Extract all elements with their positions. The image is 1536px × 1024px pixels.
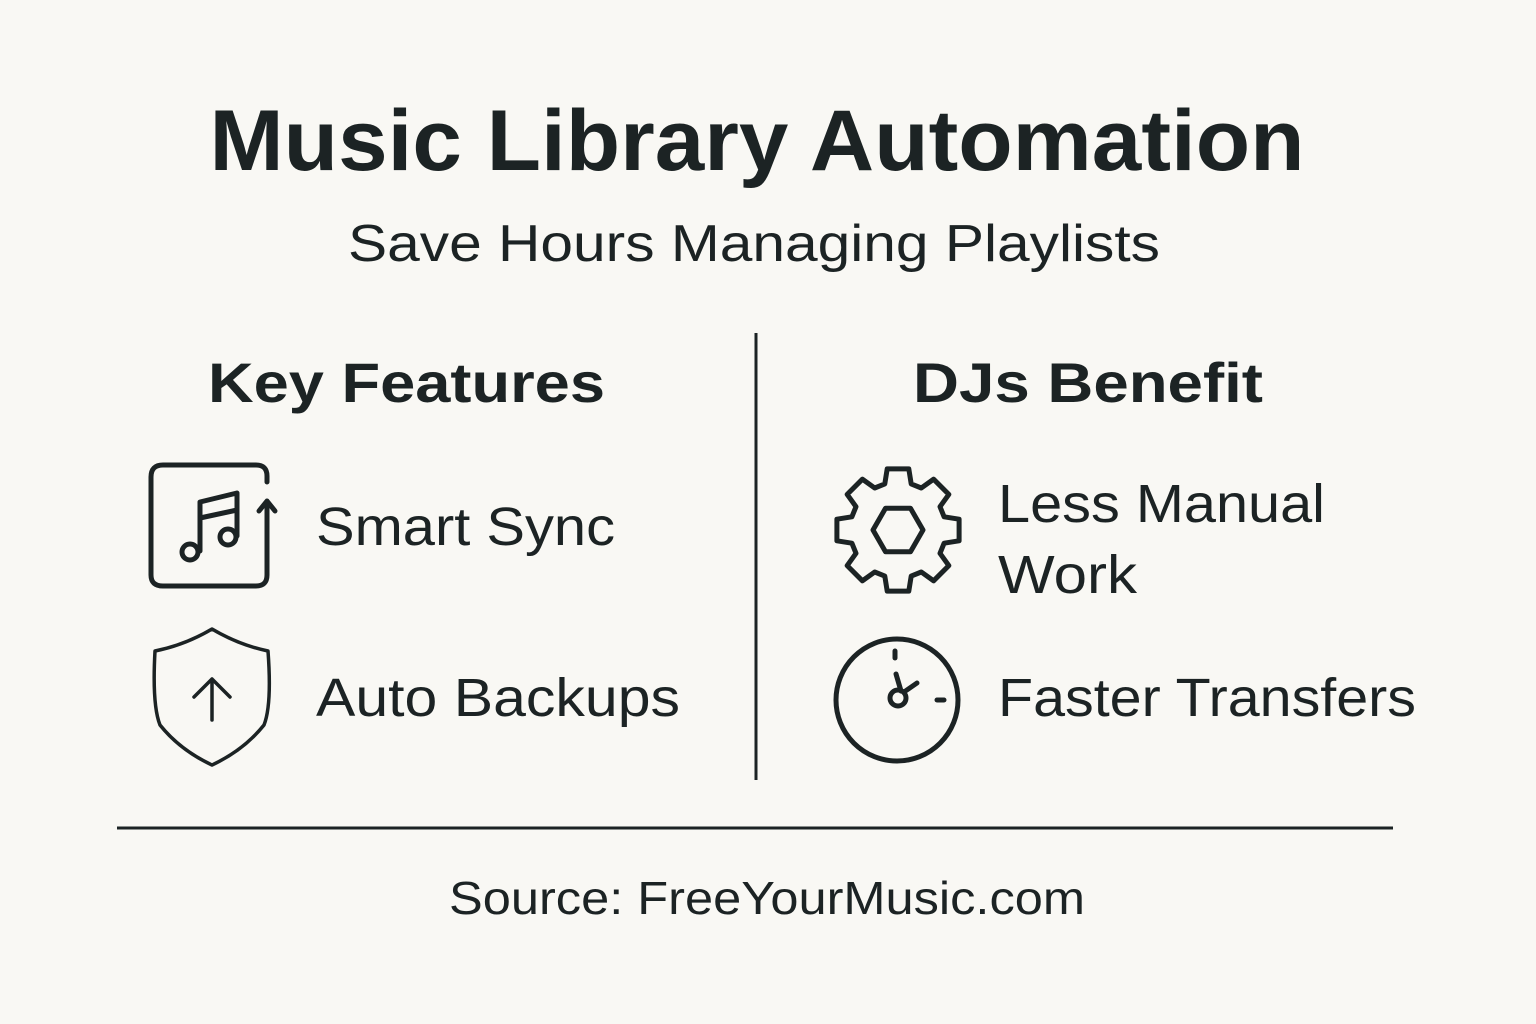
source: Source: FreeYourMusic.com — [449, 872, 1085, 924]
icon: music sync — [151, 465, 275, 586]
label: faster transfers: Faster Transfers — [998, 668, 1416, 728]
icon: stopwatch — [836, 639, 958, 761]
label: less manual work: Less Manual — [998, 474, 1325, 534]
heading: key features: Key Features — [208, 351, 605, 414]
panel: djs benefit — [836, 351, 1416, 761]
panel: djs benefit: Work — [998, 545, 1138, 605]
icon: shield backup — [154, 629, 269, 765]
subtitle: Save Hours Managing Playlists — [348, 215, 1160, 273]
icon: gear — [837, 469, 959, 591]
title: Music Library Automation — [210, 93, 1304, 189]
panel: key features — [151, 351, 680, 765]
label: smart sync: Smart Sync — [316, 497, 615, 557]
label: auto backups: Auto Backups — [316, 668, 680, 728]
heading: djs benefit: DJs Benefit — [913, 351, 1263, 414]
